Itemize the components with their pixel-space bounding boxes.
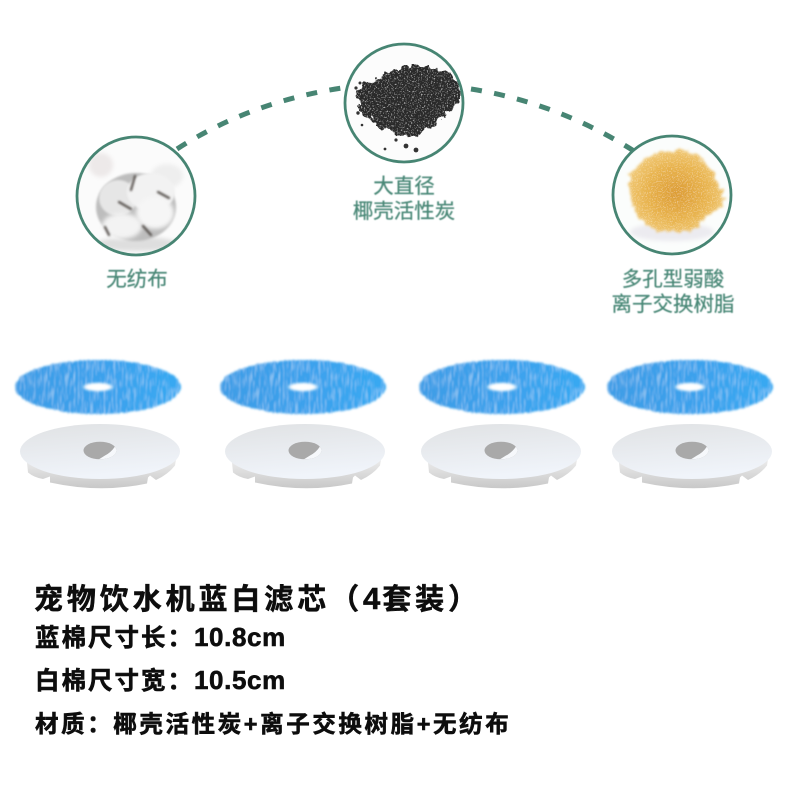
dashed arc: cotton to charcoal <box>177 88 342 149</box>
blue filter disc 3 <box>419 360 585 414</box>
label: ion exchange resin: 多孔型弱酸 <box>622 268 724 291</box>
white filter disc 3 <box>421 424 581 488</box>
icon: coconut charcoal circle <box>345 44 463 162</box>
spec: material: 材质：椰壳活性炭+离子交换树脂+无纺布 <box>35 710 511 737</box>
icon: ion exchange resin circle <box>613 136 731 254</box>
white filter disc 1 <box>20 424 180 488</box>
dashed arc: charcoal to resin <box>471 89 634 151</box>
spec: white cotton size: 白棉尺寸宽：10.5cm <box>35 665 286 695</box>
title: 宠物饮水机蓝白滤芯（4套装） <box>34 581 481 616</box>
white filter disc 2 <box>225 424 385 488</box>
label: coconut charcoal: 椰壳活性炭 <box>353 200 455 223</box>
icon: cotton circle <box>77 137 195 255</box>
label: ion exchange resin: 离子交换树脂 <box>612 293 734 316</box>
white filter disc 4 <box>612 424 772 488</box>
label: coconut charcoal <box>353 175 455 223</box>
spec: blue cotton size: 蓝棉尺寸长：10.8cm <box>35 622 286 652</box>
label: coconut charcoal: 大直径 <box>373 175 435 198</box>
label: non-woven fabric: 无纺布 <box>106 268 168 291</box>
blue filter disc 1 <box>15 360 181 414</box>
blue filter disc 4 <box>607 360 773 414</box>
label: ion exchange resin <box>612 268 734 316</box>
blue filter disc 2 <box>220 360 386 414</box>
